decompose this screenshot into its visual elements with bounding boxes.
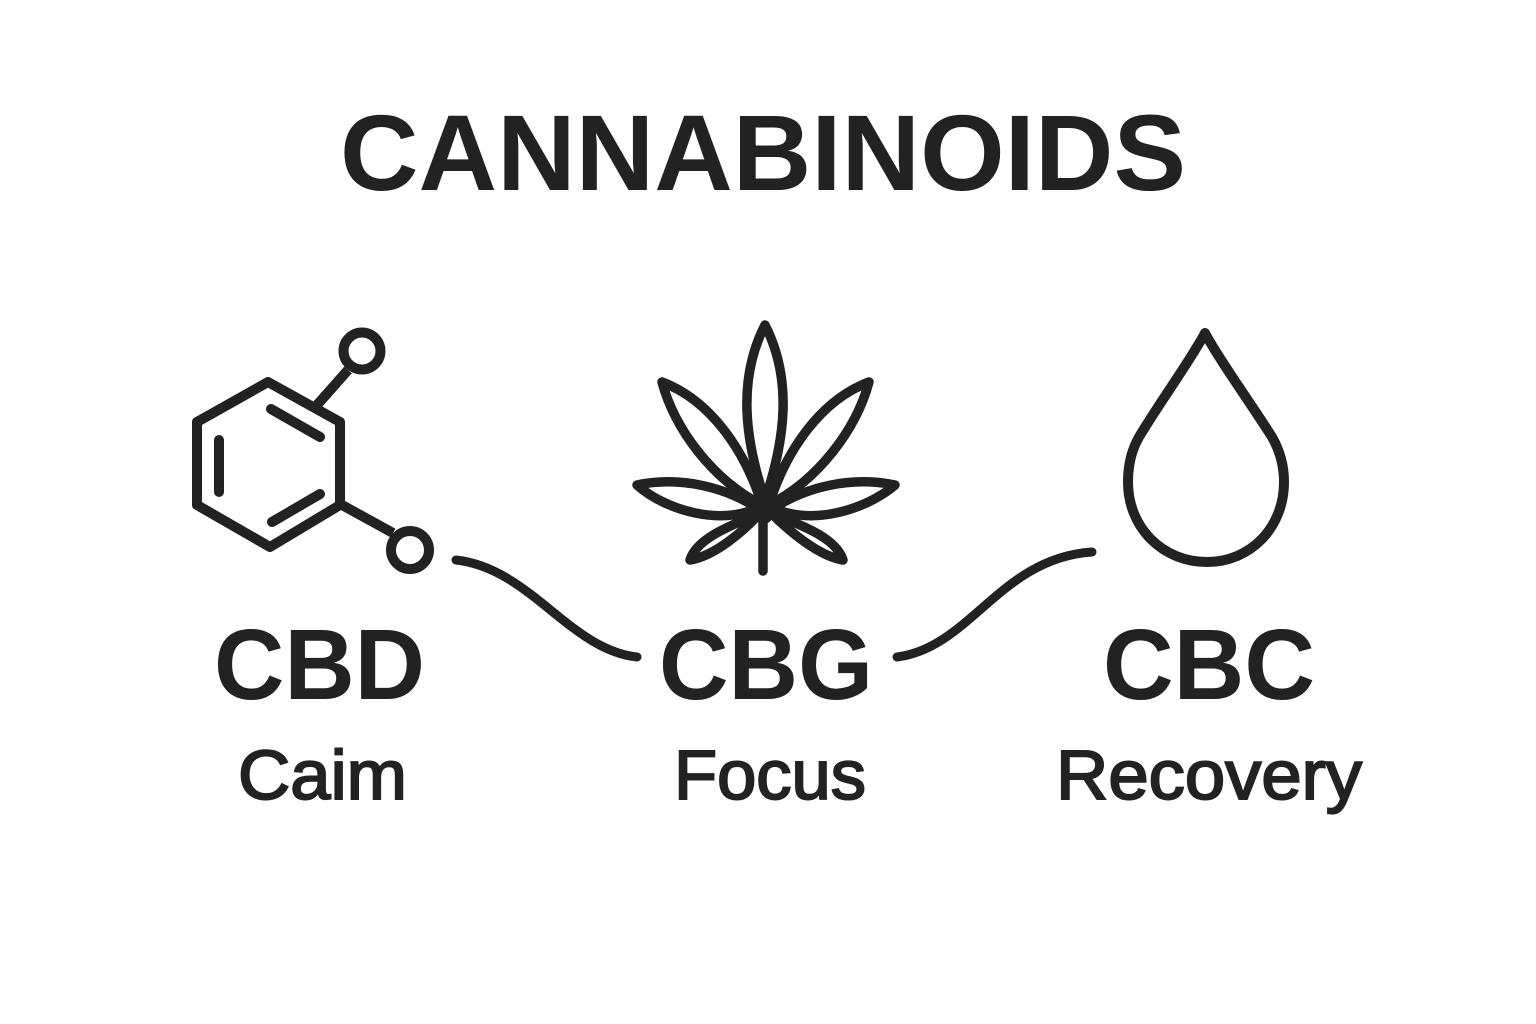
arrow: connector CBD to CBG bbox=[456, 560, 637, 657]
title: CANNABINOIDS bbox=[340, 92, 1186, 213]
label: CBC: CBC bbox=[1103, 609, 1315, 721]
arrow: connector CBG to CBC bbox=[897, 552, 1092, 657]
text: Focus: Focus bbox=[674, 736, 866, 814]
icon: molecule bbox=[197, 332, 429, 569]
label: CBG: CBG bbox=[659, 609, 873, 721]
text: Recovery: Recovery bbox=[1056, 736, 1362, 814]
label: CBD: CBD bbox=[214, 609, 425, 721]
icon: oil drop bbox=[1128, 333, 1284, 562]
text: Caim: Caim bbox=[238, 736, 407, 814]
icon: cannabis leaf bbox=[637, 325, 895, 571]
